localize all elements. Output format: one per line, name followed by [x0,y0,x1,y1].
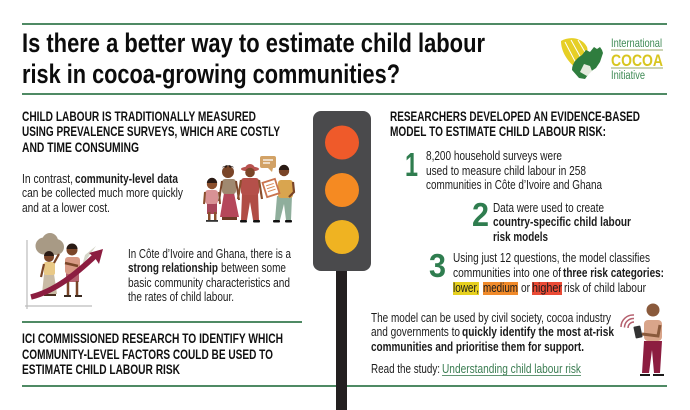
orange light [325,173,359,207]
text block: model use: The model can be used by civil society, cocoa industry [371,311,612,325]
step 3 text: or [521,281,530,295]
heading: ICI commissioned research [22,331,283,377]
title: Is there a better way to estimate child labour [22,28,485,58]
title: risk in cocoa-growing communities? [22,59,400,89]
phone [633,325,643,339]
step 2 text: risk models [493,230,548,244]
arm [642,325,660,336]
text block: strong relationship [128,247,291,304]
number 2: 2 [472,196,489,233]
step 2 text: country-specific child labour [493,215,631,229]
icon: community group with speech bubble and clipboard [204,156,294,222]
text block: community-level data: can be collected much more quickly [22,186,184,200]
text block: model use: communities and prioritise them for support. [371,340,584,354]
step 1 text [426,149,602,192]
icon: man with phone [621,304,664,376]
heading: prevalence surveys: AND TIME CONSUMING [22,140,139,155]
legs [642,341,662,373]
heading: ICI commissioned research: COMMUNITY-LEVEL FACTORS COULD BE USED TO [22,347,273,362]
step 1 text: communities in Côte d’Ivoire and Ghana [426,178,602,192]
logo: International Cocoa Initiative: COCOA [611,51,663,70]
text block: strong relationship: strong relationship [128,261,218,275]
step 3 [429,247,664,295]
step 3 text: risk of child labour [564,281,646,295]
link: read the study: Read the study: [371,362,440,376]
heading: prevalence surveys: CHILD LABOUR IS TRADITIONALLY MEASURED [22,109,256,124]
step 3 text: three risk categories: [563,266,664,280]
step 3 text: lower, [453,281,479,295]
text block: strong relationship: In Côte d’Ivoire and Ghana, there is a [128,247,291,261]
link: read the study: Understanding child labour risk [442,362,582,376]
text block: strong relationship: basic community characteristics and [128,276,290,290]
logo: International Cocoa Initiative: International [611,36,662,50]
man with clipboard [273,165,294,222]
clipboard [263,179,279,197]
text block: model use [371,311,614,354]
number 3: 3 [429,247,446,284]
housing [313,111,371,271]
woman [219,165,239,220]
red light [325,126,359,160]
cocoa load on head [36,233,64,255]
heading: ICI commissioned research: ICI COMMISSIONED RESEARCH TO IDENTIFY WHICH [22,331,283,346]
heading: ICI commissioned research: ESTIMATE CHILD LABOUR RISK [22,362,180,377]
step 3 text: higher [532,281,562,295]
text block: strong relationship: between some [221,261,286,275]
torso [644,320,662,341]
pole [336,265,347,410]
speech bubble [260,156,276,172]
heading: evidence-based model: MODEL TO ESTIMATE CHILD LABOUR RISK: [390,124,606,139]
signal waves [621,315,634,328]
step 2 text: Data were used to create [493,201,604,215]
text block: community-level data: and at a lower cost. [22,201,110,215]
shoes [640,374,664,376]
head [646,304,660,316]
traffic light [313,111,371,410]
link: read the study [371,362,582,376]
chart axes [25,240,92,309]
icon: children with rising arrow chart [25,233,103,309]
step 3 text [453,251,664,295]
heading: prevalence surveys: USING PREVALENCE SURVEYS, WHICH ARE COSTLY [22,124,280,139]
text block: community-level data: community-level data [75,172,179,186]
child [204,178,220,222]
logo: International Cocoa Initiative: Initiative [611,70,645,82]
text block: community-level data [22,172,184,215]
number 1: 1 [405,146,418,183]
text block: community-level data: In contrast, [22,172,73,186]
text block: model use: and governments to [371,325,460,339]
title [22,28,485,89]
step 1 [405,146,602,192]
step 2 text [493,201,631,244]
logo: International Cocoa Initiative [561,36,663,82]
text block: strong relationship: the rates of child labour. [128,290,234,304]
step 2 [472,196,631,244]
step 1 text: 8,200 household surveys were [426,149,562,163]
rising arrow [31,249,103,297]
step 3 text: medium [483,281,518,295]
person with hat [238,164,262,222]
step 3 text: communities into one of [453,266,561,280]
heading: evidence-based model [390,109,640,139]
heading: prevalence surveys [22,109,280,155]
text block: model use: quickly identify the most at-risk [462,325,614,339]
icon: cocoa pod and hands [561,38,603,79]
girl [41,251,59,296]
boy with machete [64,244,96,297]
step 1 text: used to measure child labour in 258 [426,164,586,178]
yellow light [325,220,359,254]
